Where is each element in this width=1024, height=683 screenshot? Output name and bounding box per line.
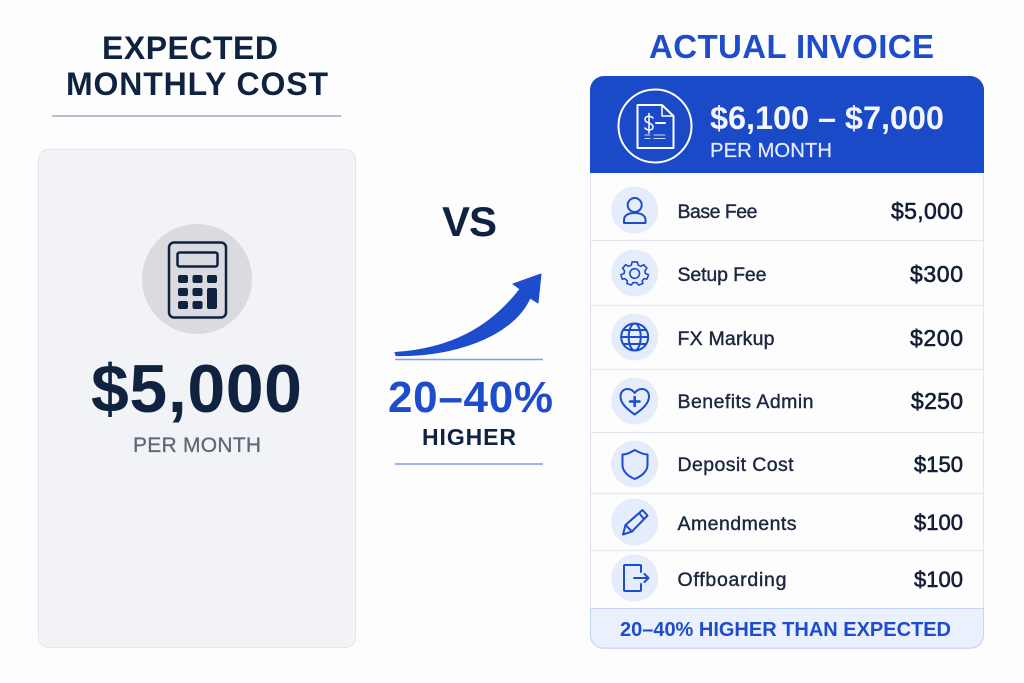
row: setup fee: $300 [910, 261, 963, 287]
row: benefits admin: $250 [911, 388, 963, 414]
vs label: VS [442, 198, 497, 245]
expected amount: $5,000 [91, 351, 302, 427]
row: setup fee [611, 250, 963, 296]
right column: actual invoice [590, 28, 984, 648]
invoice header [590, 76, 984, 173]
row: deposit cost: Deposit Cost [678, 454, 794, 476]
panel: invoice card [590, 76, 984, 648]
icon: pencil [623, 510, 648, 534]
arrow: rising cost [395, 274, 541, 356]
icon: shield [622, 450, 648, 479]
row: offboarding [611, 554, 963, 602]
row: benefits admin [611, 378, 963, 424]
row: fx markup [611, 314, 963, 360]
invoice period label: PER MONTH [710, 140, 832, 162]
row: offboarding: Offboarding [678, 569, 786, 591]
row: amendments: Amendments [678, 513, 797, 535]
icon: invoice document [618, 90, 692, 162]
percentage increase: 20–40% [388, 373, 553, 422]
icon: calculator [142, 224, 252, 334]
row: deposit cost [611, 440, 963, 488]
row: deposit cost: $150 [914, 452, 963, 477]
row: offboarding: $100 [914, 567, 963, 592]
left heading [66, 30, 328, 102]
icon: exit door [624, 565, 648, 591]
icon: heart with plus [620, 389, 649, 414]
row: amendments [611, 498, 963, 546]
row: benefits admin: Benefits Admin [678, 391, 814, 413]
footer banner: 20–40% HIGHER THAN EXPECTED [620, 619, 951, 641]
left heading: EXPECTED [102, 30, 278, 66]
left heading: MONTHLY COST [66, 66, 328, 102]
right heading: ACTUAL INVOICE [649, 28, 934, 65]
left column: expected monthly cost [38, 30, 356, 648]
row: fx markup: $200 [910, 325, 963, 351]
row: base fee: Base Fee [678, 201, 758, 223]
row: fx markup: FX Markup [678, 328, 775, 350]
higher label: HIGHER [422, 424, 516, 450]
panel: expected cost card [38, 150, 356, 648]
center comparison [388, 198, 553, 464]
row: setup fee: Setup Fee [678, 264, 766, 286]
row: base fee: $5,000 [891, 198, 963, 224]
footer banner [590, 608, 984, 648]
icon: gear [621, 262, 649, 285]
icon: globe [621, 324, 648, 350]
row: amendments: $100 [914, 510, 963, 535]
expected period label: PER MONTH [133, 434, 261, 457]
invoice total: $6,100 – $7,000 [710, 100, 944, 136]
row: base fee [611, 186, 963, 234]
icon: person [624, 198, 646, 223]
